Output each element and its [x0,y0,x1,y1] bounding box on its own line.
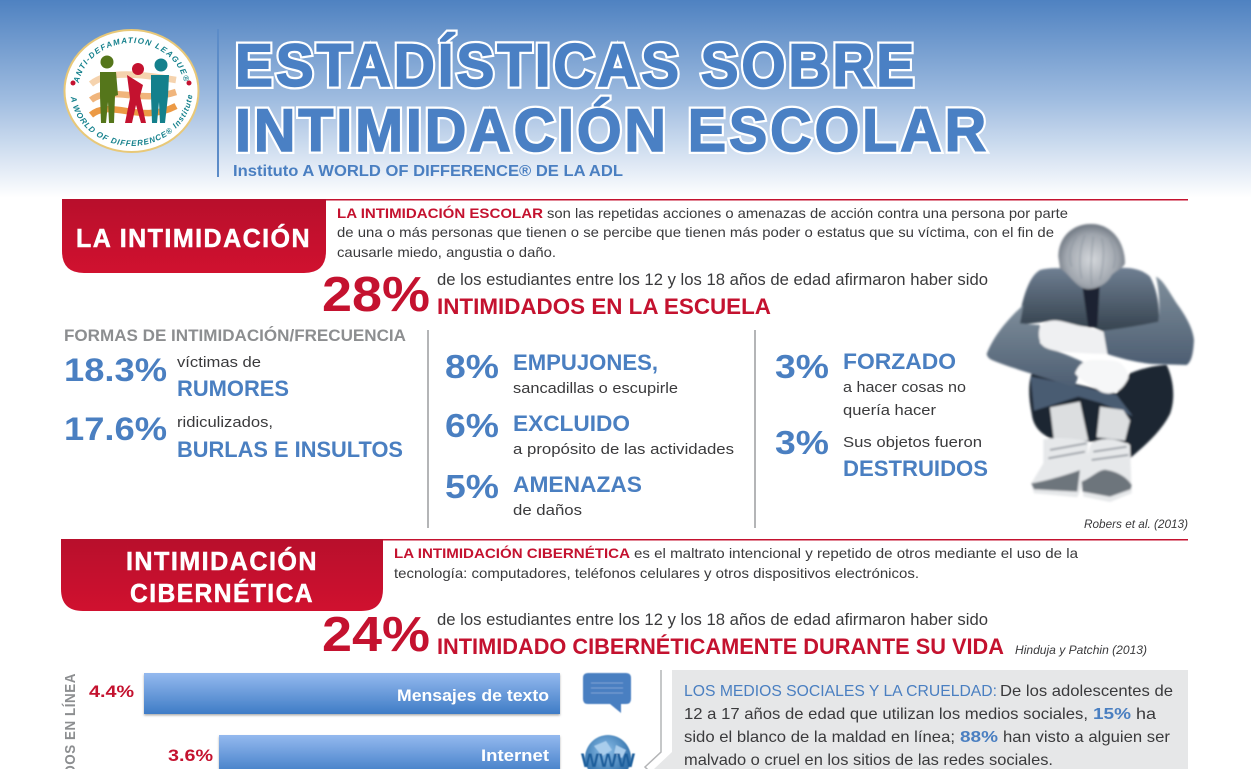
stat: amenazas: 5% [445,468,499,505]
stat: burlas e insultos: BURLAS E INSULTOS [177,437,403,462]
bar: internet: 3.6% [168,746,213,765]
stat: 28%: de los estudiantes entre los 12 y los 18 años de edad afirmaron haber sido [437,270,988,289]
photo: seated boy hugging knees [987,224,1194,502]
stat: forzado: a hacer cosas no [843,379,966,396]
stat: 24%: 24% [322,608,430,662]
stat: rumores: víctimas de [177,354,261,371]
panel: la intimidación heading: LA INTIMIDACIÓN [76,223,311,253]
stat: 24% [322,608,1147,662]
stat: amenazas [445,468,642,519]
bar: internet: Internet [481,747,550,765]
logo figures [100,56,169,123]
stat: forzado: FORZADO [843,349,956,374]
stat: empujones: 8% [445,348,499,385]
panel: los medios sociales y la crueldad: 88% [960,729,998,746]
stat: 24%: Hinduja y Patchin (2013) [1015,643,1147,657]
stat: burlas e insultos [64,411,403,462]
stat: destruidos [775,424,988,481]
stat: excluido: EXCLUIDO [513,411,630,436]
definition text: intimidación escolar: causarle miedo, angustia o daño. [337,244,556,260]
definition text: intimidación escolar: son las repetidas acciones o amenazas de acción contra una persona por parte [547,205,1068,221]
definition text: intimidación escolar: de una o más personas que tienen o se percibe que tienen más poder o estatus que su víctima, con el fin de [337,224,1054,240]
subtitle: Instituto A WORLD OF DIFFERENCE® DE LA ADL [233,163,623,180]
panel: los medios sociales y la crueldad: LOS MEDIOS SOCIALES Y LA CRUELDAD: [684,683,997,700]
stat: excluido: a propósito de las actividades [513,441,734,458]
logo ring lettering: ANTI-DEFAMATION LEAGUE® [74,37,189,84]
panel: la intimidación heading [62,199,326,273]
panel: los medios sociales y la crueldad: han visto a alguien ser [1003,729,1171,746]
panel: intimidación cibernética heading: CIBERNÉTICA [130,578,314,608]
stat: rumores: 18.3% [64,352,167,388]
stat: excluido [445,407,734,458]
definition text: intimidación cibernética [394,544,1078,581]
icon: speech bubble [583,673,631,713]
header vertical rule [217,29,219,177]
stat: 28% [322,268,988,322]
definition text: intimidación cibernética: tecnología: computadores, teléfonos celulares y otros dispositivos electrónicos. [394,565,919,581]
stat: forzado [775,348,966,419]
bar: internet [168,735,560,769]
stat: burlas e insultos: 17.6% [64,411,167,447]
title: ESTADÍSTICAS SOBRE [235,32,917,99]
stat: 28%: INTIMIDADOS EN LA ESCUELA [437,294,771,319]
panel: los medios sociales y la crueldad [645,670,1188,769]
stat: empujones: EMPUJONES, [513,350,658,375]
logo ribbons [91,74,176,115]
stat: destruidos: DESTRUIDOS [843,456,988,481]
stat: burlas e insultos: ridiculizados, [177,414,273,431]
title: INTIMIDACIÓN ESCOLAR [235,97,989,164]
bar: mensajes de texto [89,673,560,714]
title: ESTADÍSTICAS SOBRE [235,32,917,99]
panel: los medios sociales y la crueldad: ha [1136,706,1156,723]
panel: los medios sociales y la crueldad: sido el blanco de la maldad en línea; [684,729,955,746]
panel: intimidación cibernética heading [61,539,383,611]
panel: los medios sociales y la crueldad: 12 a 17 años de edad que utilizan los medios sociales, [684,706,1088,723]
stat: rumores: RUMORES [177,376,289,401]
stat: destruidos: Sus objetos fueron [843,434,982,451]
heading: formas de intimidación: FORMAS DE INTIMIDACIÓN/FRECUENCIA [64,326,406,345]
logo ring lettering: A WORLD OF DIFFERENCE® Institute [70,94,192,146]
panel: los medios sociales y la crueldad: malvado o cruel en los sitios de las redes sociales. [684,752,1053,769]
logo ring lettering [70,37,192,146]
panel: los medios sociales y la crueldad: 15% [1093,706,1131,723]
stat: 28%: 28% [322,268,430,322]
stat: empujones [445,348,678,397]
stat: excluido: 6% [445,407,499,444]
definition text: intimidación escolar [337,204,1068,260]
logo: Anti-Defamation League seal [64,29,200,153]
bar: mensajes de texto: 4.4% [89,682,134,701]
stat: destruidos: 3% [775,424,829,461]
panel: intimidación cibernética heading: INTIMIDACIÓN [126,546,318,576]
section rule [61,539,1188,540]
definition text: intimidación escolar: LA INTIMIDACIÓN ESCOLAR [337,204,543,221]
icon: www globe [581,735,635,769]
stat: 24%: INTIMIDADO CIBERNÉTICAMENTE DURANTE SU VIDA [437,634,1004,659]
bar: mensajes de texto: Mensajes de texto [397,687,549,705]
panel: los medios sociales y la crueldad: De los adolescentes de [1000,683,1173,700]
section rule [62,199,1188,200]
definition text: intimidación cibernética: es el maltrato intencional y repetido de otros mediante el uso de la [634,545,1078,561]
definition text: intimidación cibernética: LA INTIMIDACIÓN CIBERNÉTICA [394,544,630,561]
header gradient band [0,0,1251,198]
stat: forzado: quería hacer [843,402,936,419]
stat: forzado: 3% [775,348,829,385]
title [235,32,989,164]
stat: 24%: de los estudiantes entre los 12 y los 18 años de edad afirmaron haber sido [437,610,988,629]
stat: amenazas: de daños [513,502,582,519]
title: INTIMIDACIÓN ESCOLAR [235,97,989,164]
citation: Robers: Robers et al. (2013) [1084,517,1188,531]
stat: rumores [64,352,289,401]
stat: empujones: sancadillas o escupirle [513,380,678,397]
stat: amenazas: AMENAZAS [513,472,642,497]
